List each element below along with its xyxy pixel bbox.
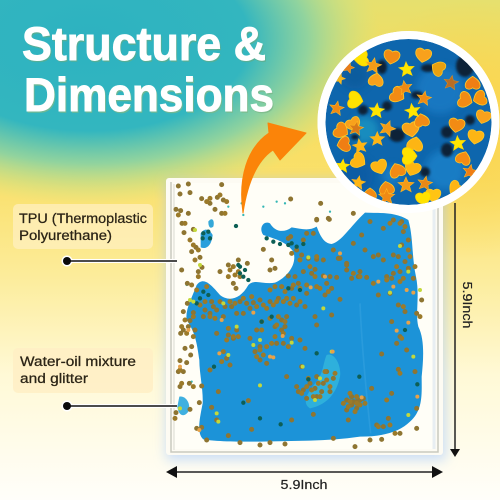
title: Dimensions — [24, 68, 274, 121]
label: water-oil mixture: Water-oil mixture — [20, 354, 136, 369]
label: TPU: Polyurethane) — [19, 228, 112, 243]
glitter: dark and gold sequins — [176, 184, 422, 447]
title: Dimensions — [25, 70, 275, 122]
label: water-oil mixture: and glitter — [20, 371, 89, 386]
product panel: transparent square with blue liquid and glitter — [166, 178, 446, 460]
height dimension arrow — [450, 203, 460, 457]
height label: 5.9Inch — [460, 281, 475, 329]
label: TPU: TPU (Thermoplastic — [19, 211, 147, 226]
title: Structure & — [22, 17, 266, 70]
label: TPU — [13, 204, 153, 249]
magnified circle: close-up of glitter — [318, 30, 500, 220]
width label: 5.9Inch — [280, 477, 328, 492]
leader line: TPU — [62, 256, 177, 266]
title — [22, 17, 275, 122]
hearts in orange and yellow — [332, 47, 492, 202]
label: water-oil mixture — [13, 348, 153, 393]
width dimension arrow — [166, 466, 443, 478]
teal specks — [187, 202, 330, 382]
title: Structure & — [23, 18, 267, 72]
leader line: water-oil mixture — [62, 400, 177, 412]
stars in orange and yellow — [328, 56, 478, 203]
arrow: orange curved arrow to magnified view — [242, 123, 306, 213]
blue water-oil liquid — [175, 184, 423, 447]
